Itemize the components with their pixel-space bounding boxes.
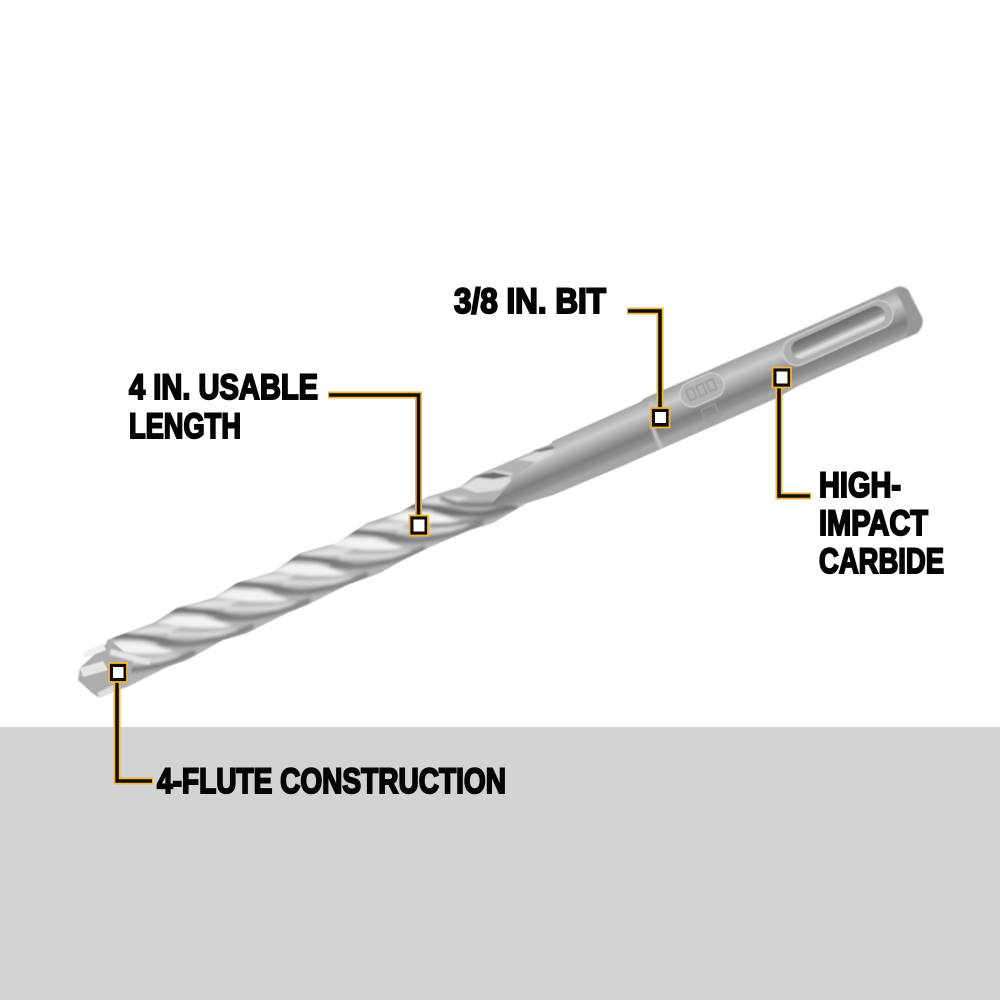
flute run-out ovals — [460, 446, 554, 493]
callout: high-impact carbide — [772, 368, 944, 581]
callout: 4 in. usable length: LENGTH — [129, 407, 241, 446]
callout: 4 in. usable length: 4 IN. USABLE — [129, 368, 318, 407]
callout: high-impact carbide: IMPACT — [819, 504, 928, 543]
callout: 4-flute construction: 4-FLUTE CONSTRUCTION — [157, 762, 506, 801]
grey floor band — [0, 727, 1000, 1000]
shoulder ring — [651, 402, 662, 448]
shank end cap — [893, 287, 922, 338]
SDS slot — [778, 296, 898, 370]
callout: high-impact carbide: CARBIDE — [819, 542, 944, 581]
drill bit — [78, 287, 922, 710]
carbide tip — [78, 640, 150, 698]
callout: high-impact carbide: HIGH- — [819, 466, 901, 505]
shank — [490, 287, 922, 506]
stamped logo — [676, 369, 736, 428]
callout: 4 in. usable length — [129, 368, 428, 536]
callout: 4-flute construction — [109, 663, 506, 801]
fluted section — [106, 444, 550, 690]
callout: 3/8 in. bit — [454, 282, 670, 428]
callout: 3/8 in. bit: 3/8 IN. BIT — [454, 282, 606, 321]
